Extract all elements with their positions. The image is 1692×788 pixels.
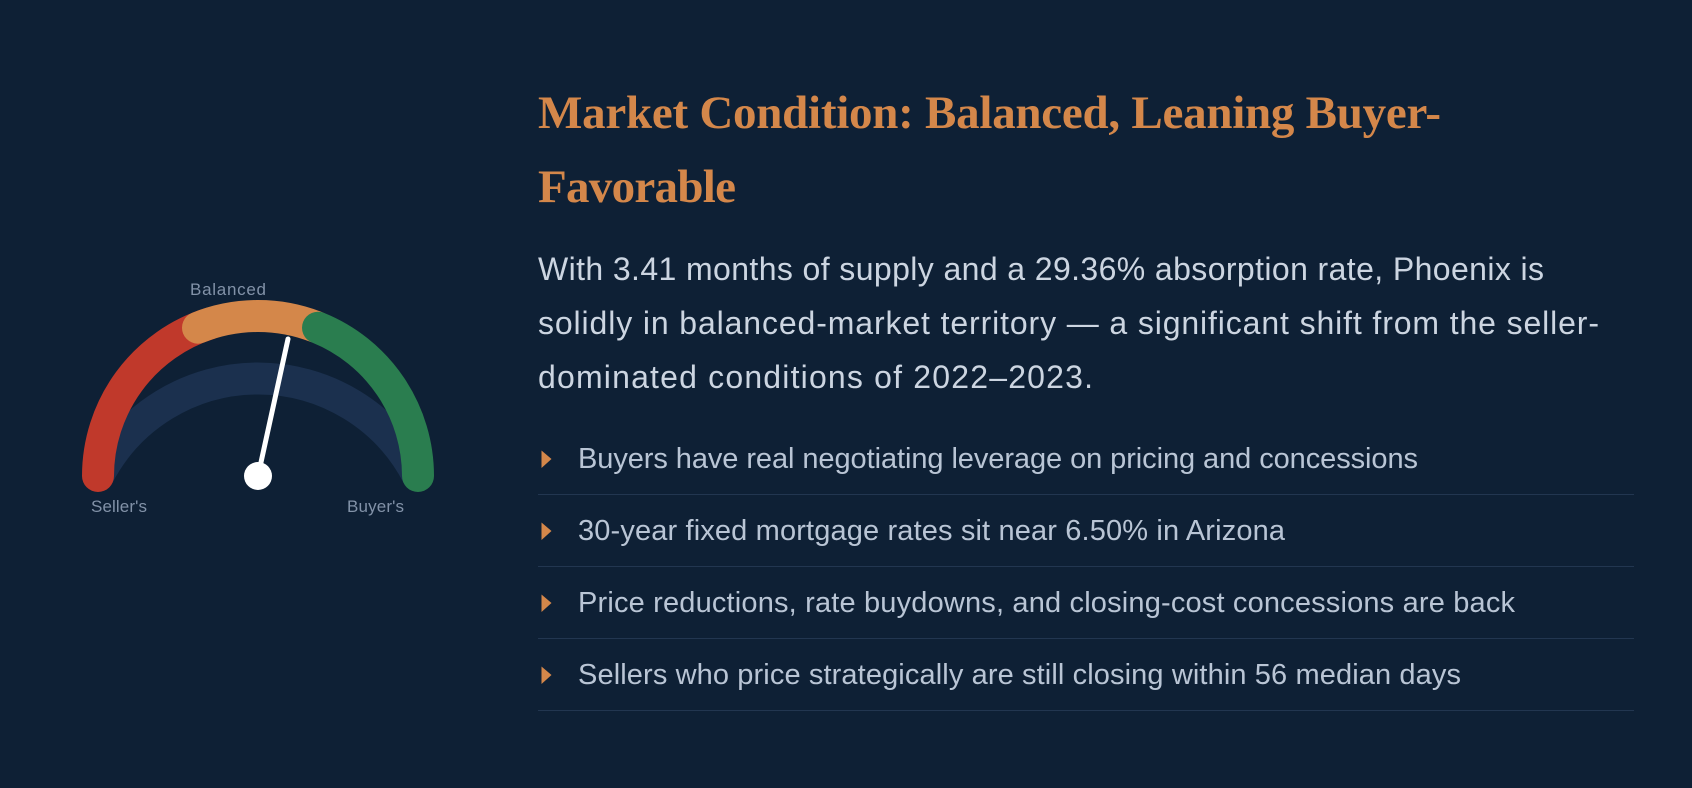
gauge needle (258, 339, 288, 476)
intro paragraph: dominated conditions of 2022–2023. (538, 359, 1093, 395)
list item: median days: Sellers who price strategically are still closing within 56 median days (578, 659, 1461, 691)
gauge label: seller's: Seller's (91, 497, 147, 516)
list item: mortgage rates (538, 515, 1634, 567)
list item: median days (538, 659, 1634, 711)
list item: negotiating leverage: Buyers have real negotiating leverage on pricing and concessions (578, 443, 1418, 475)
intro paragraph: solidly in balanced-market territory — a significant shift from the seller- (538, 305, 1599, 341)
gauge segment: buyer's market (318, 328, 418, 476)
panel: market gauge (91, 280, 418, 516)
heading (538, 87, 1441, 213)
intro paragraph (538, 251, 1599, 395)
intro paragraph: With 3.41 months of supply and a 29.36% absorption rate, Phoenix is (538, 251, 1544, 287)
list item: mortgage rates: 30-year fixed mortgage rates sit near 6.50% in Arizona (578, 515, 1286, 547)
gauge label: buyer's: Buyer's (347, 497, 404, 516)
heading: Favorable (538, 161, 736, 213)
gauge label: balanced: Balanced (190, 280, 266, 299)
gauge segment: seller's market (98, 323, 210, 476)
list item: concessions (538, 587, 1634, 639)
gauge segment: balanced market (198, 316, 316, 328)
list item: negotiating leverage (538, 443, 1634, 495)
gauge needle pivot (244, 462, 272, 490)
gauge inner track (98, 378, 418, 476)
heading: Market Condition: Balanced, Leaning Buyer- (538, 87, 1441, 139)
bullet list (538, 443, 1634, 711)
list item: concessions: Price reductions, rate buydowns, and closing-cost concessions are back (578, 587, 1516, 619)
